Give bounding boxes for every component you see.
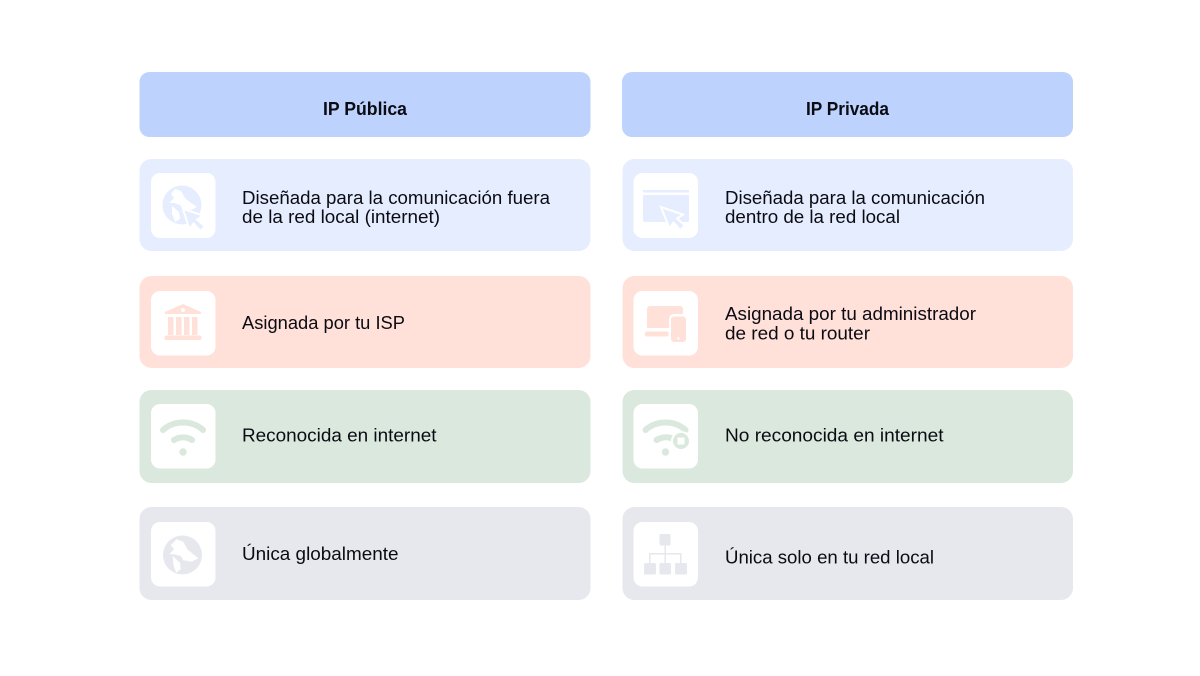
icon: bank building: [164, 304, 202, 340]
panel: privado, no reconocida: [622, 390, 1073, 483]
text: única solo en tu red local: Única solo en tu red local: [725, 546, 934, 568]
panel: público, comunicación: [140, 159, 590, 251]
panel: público, única: [140, 507, 590, 600]
text: comunicación dentro de la red local: Diseñada para la comunicación: [725, 188, 985, 208]
text: no reconocida en internet: No reconocida en internet: [725, 426, 944, 446]
text: administrador de red o router: Asignada por tu administrador: [725, 304, 976, 324]
text: administrador de red o router: [725, 304, 976, 344]
text: comunicación fuera de la red local: [242, 188, 551, 227]
panel: header IP Privada: [622, 72, 1073, 137]
panel: privado, comunicación: [622, 159, 1073, 251]
icon: network hierarchy: [644, 534, 687, 574]
text: comunicación fuera de la red local: de la red local (internet): [242, 207, 440, 227]
panel: público, asignación: [140, 276, 590, 368]
icon: wifi with x: [646, 422, 691, 456]
panel: público, reconocida: [140, 390, 590, 483]
icon: browser window with cursor: [643, 190, 689, 230]
text: asignada por tu ISP: Asignada por tu ISP: [242, 313, 405, 333]
text: reconocida en internet: Reconocida en internet: [242, 426, 436, 446]
panel: header IP Pública: [140, 72, 590, 137]
text: comunicación dentro de la red local: dentro de la red local: [725, 207, 900, 227]
icon: wifi: [163, 422, 203, 456]
icon: globe with cursor: [162, 186, 205, 231]
text: comunicación fuera de la red local: Diseñada para la comunicación fuera: [242, 188, 551, 208]
panel: privado, única: [622, 507, 1073, 600]
heading: IP Pública: IP Pública: [323, 99, 408, 119]
icon: laptop and phone: [645, 306, 686, 342]
icon: globe: [163, 536, 202, 574]
text: administrador de red o router: de red o tu router: [725, 324, 870, 344]
panel: privado, asignación: [622, 276, 1073, 368]
text: única globalmente: Única globalmente: [242, 543, 398, 564]
heading: IP Privada: IP Privada: [806, 99, 890, 119]
text: comunicación dentro de la red local: [725, 188, 985, 227]
